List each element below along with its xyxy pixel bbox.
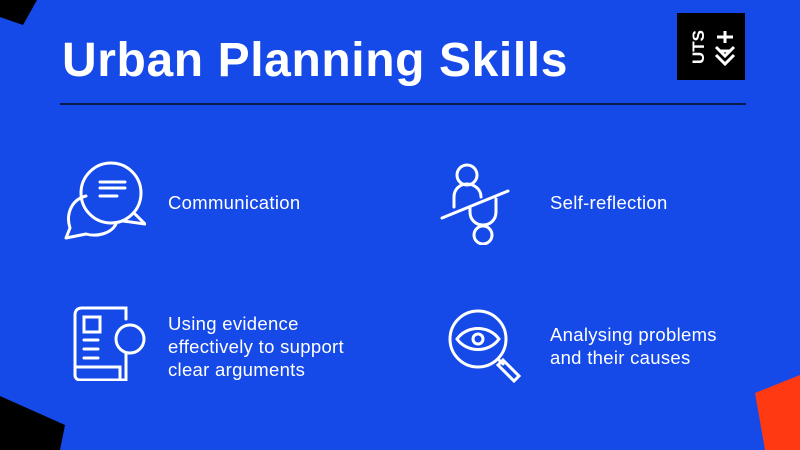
divider xyxy=(60,103,746,105)
title: Urban Planning Skills xyxy=(62,34,568,87)
text: analysing problems xyxy=(550,324,717,368)
logo: UTS: UTS xyxy=(689,30,708,64)
text: using evidence: Using evidence xyxy=(168,313,299,334)
text: using evidence: clear arguments xyxy=(168,359,305,380)
icon: magnifier eye xyxy=(448,310,521,383)
text: using evidence: effectively to support xyxy=(168,336,344,357)
text: communication: Communication xyxy=(168,192,300,213)
text: using evidence xyxy=(168,313,344,380)
text: analysing problems: Analysing problems xyxy=(550,324,717,345)
logo: UTS xyxy=(677,13,745,80)
icon: document with magnifier xyxy=(74,306,146,381)
text: self-reflection: Self-reflection xyxy=(550,192,668,213)
icon: speech bubbles xyxy=(64,162,146,240)
icon: self-reflection xyxy=(440,164,510,245)
text: analysing problems: and their causes xyxy=(550,347,691,368)
